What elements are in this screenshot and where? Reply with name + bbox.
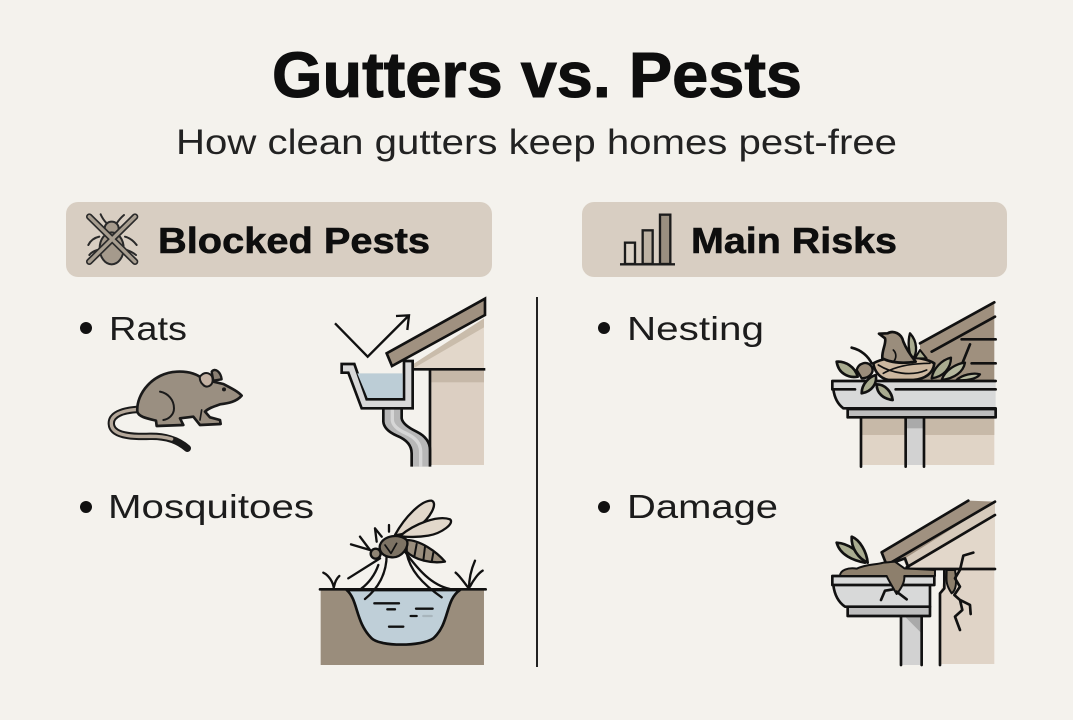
check arrow (335, 315, 409, 357)
heading: blocked pests: Blocked Pests (158, 220, 430, 261)
gutter cracks (881, 589, 907, 600)
list item: damage (598, 488, 778, 525)
list item: rats: Rats (109, 310, 187, 347)
wings (395, 501, 434, 535)
downspout (383, 409, 430, 467)
ground and pond (320, 561, 486, 665)
water (357, 373, 403, 398)
list item: damage: Damage (627, 488, 778, 525)
list item: nesting: Nesting (627, 310, 764, 347)
divider (536, 297, 538, 667)
nest (873, 357, 934, 380)
icon: crossed-out bug (88, 214, 137, 264)
gutter (342, 361, 413, 408)
body (407, 540, 445, 562)
legs (348, 552, 450, 599)
roof (882, 501, 995, 568)
heading: main risks: Main Risks (691, 220, 897, 261)
list item: mosquitoes: Mosquitoes (108, 488, 314, 525)
panel: main risks header (582, 202, 1007, 277)
subtitle: How clean gutters keep homes pest-free (176, 123, 897, 162)
gutter (832, 576, 934, 616)
leaves (837, 537, 868, 563)
wall (908, 513, 995, 665)
house wall (405, 318, 485, 465)
bird (879, 332, 916, 363)
title: Gutters vs. Pests (272, 39, 802, 111)
icon: gutter and wall damage (832, 501, 995, 665)
icon: rat (111, 370, 242, 448)
list item: rats (80, 310, 187, 347)
roof and wall (861, 302, 996, 467)
debris (840, 562, 935, 594)
downspout (901, 617, 922, 665)
icon: bird nest in gutter (832, 302, 996, 467)
list item: nesting (598, 310, 764, 347)
icon: gutter overflow (335, 299, 485, 467)
panel: blocked pests header (66, 202, 492, 277)
gutter (832, 381, 996, 417)
twigs and leaves (837, 333, 980, 380)
front leaves (862, 375, 893, 400)
icon: mosquito over standing water (320, 501, 486, 665)
roof (387, 299, 485, 366)
icon: bar chart (620, 215, 675, 264)
